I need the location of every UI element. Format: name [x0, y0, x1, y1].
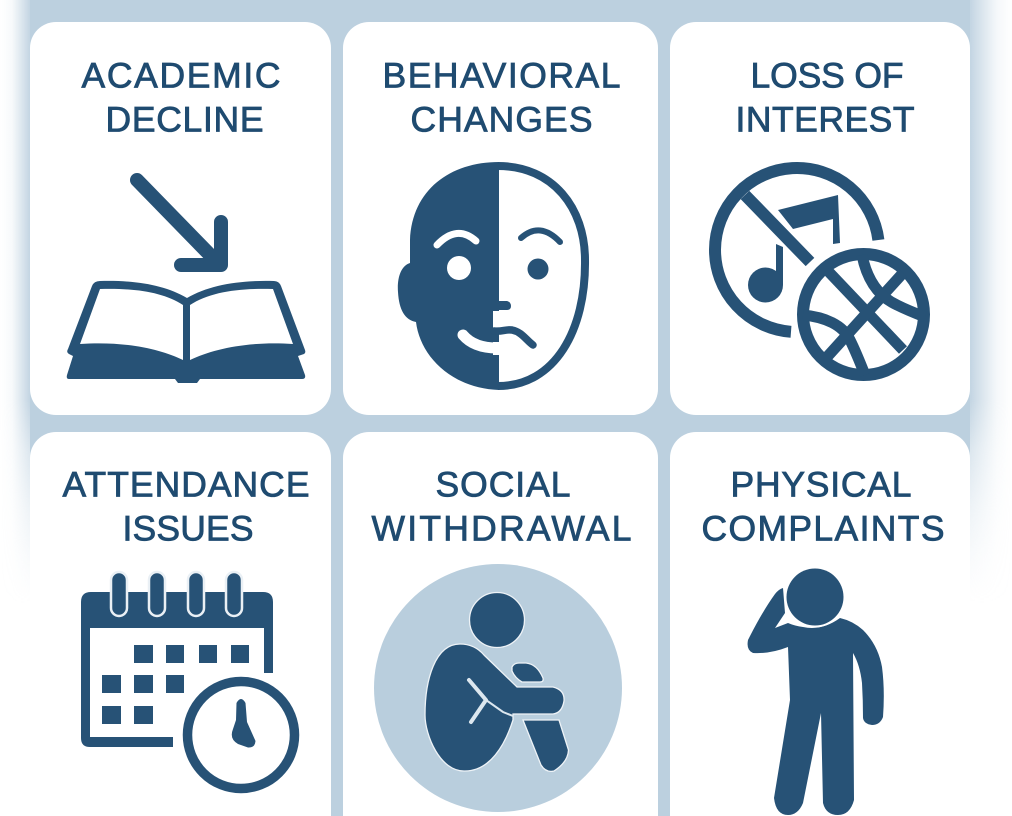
heading: WITHDRAWAL [372, 508, 632, 548]
panel: behavioral changes [343, 22, 658, 415]
panel: loss of interest [670, 22, 970, 415]
icon: down arrow [137, 180, 221, 265]
heading: ACADEMIC [82, 56, 280, 96]
icon: person holding head [748, 566, 884, 815]
heading [736, 56, 914, 140]
heading: ATTENDANCE [62, 464, 310, 504]
card [343, 22, 658, 415]
heading: DECLINE [106, 100, 264, 140]
icon: open book [67, 281, 305, 383]
icon: crossed-out music [715, 168, 878, 332]
card [30, 22, 331, 415]
heading [382, 56, 620, 140]
panel: attendance issues [30, 432, 331, 816]
card [670, 22, 970, 415]
icon: basketball [796, 246, 932, 382]
icon: calendar [81, 572, 273, 747]
heading: PHYSICAL [730, 464, 912, 504]
heading: CHANGES [410, 100, 592, 140]
card [343, 432, 658, 816]
panel: social withdrawal [343, 432, 658, 816]
icon: withdrawn figure in circle [374, 564, 622, 812]
heading: BEHAVIORAL [382, 56, 620, 96]
heading [372, 464, 632, 548]
heading [62, 464, 310, 548]
card [30, 432, 331, 816]
card [670, 432, 970, 816]
heading [702, 464, 944, 548]
icon: two-sided face [398, 162, 585, 390]
heading [82, 56, 280, 140]
heading: INTEREST [736, 100, 914, 140]
panel: physical complaints [670, 432, 970, 816]
icon: clock [188, 682, 294, 788]
panel: academic decline [30, 22, 331, 415]
heading: LOSS OF [750, 56, 904, 96]
heading: SOCIAL [436, 464, 570, 504]
heading: ISSUES [122, 508, 254, 548]
heading: COMPLAINTS [702, 508, 944, 548]
